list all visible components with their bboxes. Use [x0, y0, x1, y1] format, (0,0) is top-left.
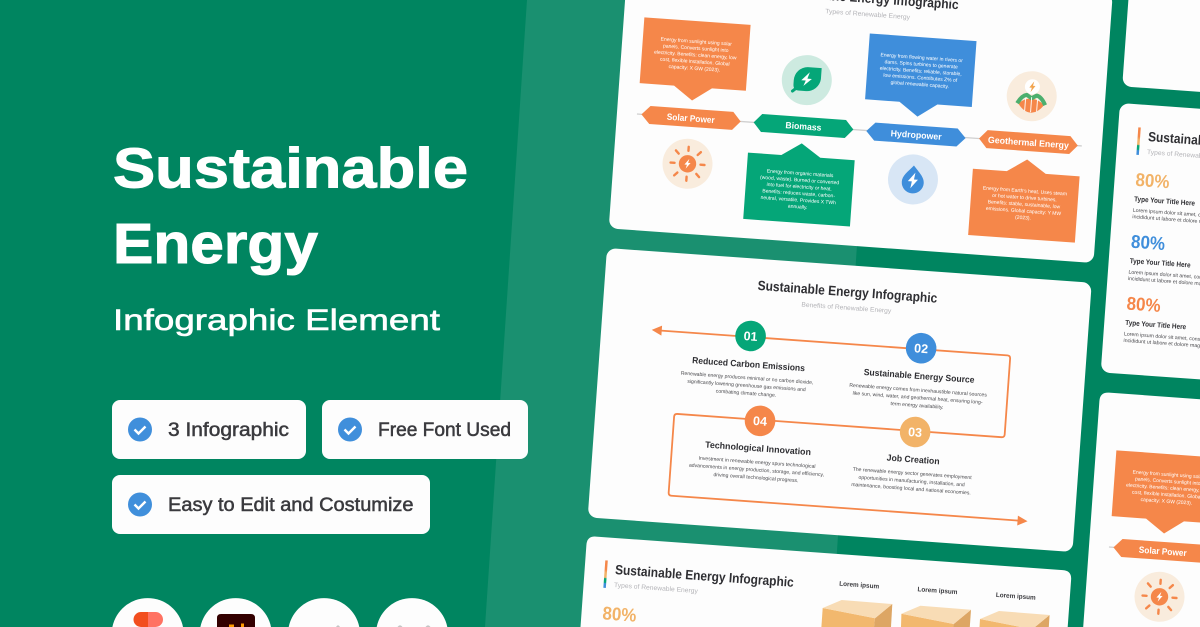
timeline line: [1109, 547, 1200, 556]
heading: Sustainable Energy: Energy: [113, 212, 318, 276]
label: Solar Power: [641, 105, 741, 130]
callout: biomass: [743, 140, 856, 227]
chart labels: Lorem ipsum: [917, 586, 958, 596]
panel: top right card: [1122, 0, 1200, 121]
icon: sun: [661, 137, 714, 191]
stat 1: [1132, 169, 1200, 233]
label: Biomass: [753, 113, 854, 139]
callout: biomass: annually.: [788, 204, 808, 211]
callout: hydropower: [864, 33, 977, 120]
callout: solar: [1111, 450, 1200, 537]
step 03: 03: [908, 425, 923, 440]
step 01: [679, 316, 817, 401]
stat: 80%: 80%: [602, 602, 637, 626]
feature chip: 3 Infographic: 3 Infographic: [168, 420, 289, 441]
stat 2: [1128, 231, 1200, 295]
callout: biomass: Benefits: reduces waste, carbon-: [762, 188, 835, 200]
heading: Sustainable Energy: [113, 136, 468, 276]
step 04: Investment in renewable energy spurs technological: [698, 456, 816, 470]
step 03: Job Creation: [886, 453, 940, 466]
callout: hydropower: low emissions. Contributes Z% of: [883, 73, 958, 84]
label: Biomass: Biomass: [785, 120, 822, 133]
icon: water drop: [886, 153, 940, 206]
label: Geothermal Energy: Geothermal Energy: [988, 135, 1069, 150]
feature chip: Easy to Edit and Costumize: Easy to Edit and Costumize: [168, 495, 414, 516]
chart labels: [839, 581, 1036, 602]
icon: geothermal: [1005, 69, 1058, 123]
callout: solar: Energy from sunlight using solar: [660, 37, 732, 48]
panel: benefits of renewable energy: [588, 248, 1092, 552]
3D bar 1: [821, 600, 892, 627]
step 02: like sun, wind, water, and geothermal heat, ensuring long-: [852, 391, 983, 406]
step 02: Renewable energy comes from inexhaustible natural sources: [849, 383, 988, 399]
callout: hydropower: global renewable capacity.: [890, 80, 949, 90]
callout: solar: panels. Converts sunlight into: [1135, 476, 1200, 487]
icon: sun: [1133, 570, 1186, 624]
icon: fourth software badge: [377, 598, 447, 627]
callout: geothermal: Benefits: stable, sustainable, low: [988, 199, 1061, 210]
callout: solar: [639, 17, 751, 104]
accent bar: [1136, 127, 1141, 155]
callout: geothermal: emissions. Global capacity: Y MW: [986, 206, 1062, 217]
callout: geothermal: or hot water to drive turbines.: [992, 193, 1057, 203]
label: Solar Power: Solar Power: [666, 112, 716, 125]
callout: geothermal: (2023).: [1015, 215, 1031, 222]
callout: geothermal: Energy from Earth's heat. Uses steam: [983, 185, 1067, 197]
feature chip: 3 Infographic: [112, 400, 306, 459]
feature chip: Free Font Used: Free Font Used: [378, 420, 511, 441]
subtitle: Benefits of Renewable Energy: [801, 302, 892, 315]
icon: third software badge: [289, 598, 359, 627]
stat 3: [1123, 292, 1200, 357]
step 01: 01: [743, 329, 758, 344]
step 01: Reduced Carbon Emissions: [692, 355, 805, 373]
callout: hydropower: electricity. Benefits: reliable, storable,: [880, 66, 962, 78]
step 04: 04: [753, 414, 767, 429]
timeline line: [637, 114, 1082, 146]
feature chip: Free Font Used: [322, 400, 528, 459]
label: Geothermal Energy: [978, 130, 1078, 155]
panel: right timeline card: [1083, 393, 1200, 627]
callout: solar: electricity. Benefits: clean energy, low: [654, 50, 737, 61]
heading: Sustainable Energy: Sustainable: [113, 136, 468, 200]
icon: Figma: [112, 598, 183, 627]
step 03: [851, 412, 976, 497]
subtitle: Types of Renewable Energy: [614, 582, 699, 595]
callout: biomass: Energy from organic materials: [767, 168, 834, 179]
step 03: opportunities in manufacturing, installation, and: [858, 475, 965, 488]
step 03: maintenance, boosting local and national economies.: [851, 482, 971, 497]
subtitle: Types of Renewable Energy: [825, 8, 911, 21]
label: Solar Power: Solar Power: [1138, 545, 1188, 558]
callout: geothermal: [968, 156, 1081, 243]
chart labels: Lorem ipsum: [996, 592, 1036, 602]
callout: biomass: neutral, versatile. Provides X TWh: [760, 195, 836, 206]
callout: biomass: (wood, waste). Burned or converted: [760, 175, 840, 186]
stat 3: 80%: [1126, 293, 1161, 316]
step 02: 02: [914, 341, 929, 356]
3D bar 2: [901, 606, 971, 627]
title: Sustainable Energy Infographic: [757, 278, 938, 306]
3D bar 3: [980, 611, 1050, 627]
step 03: The renewable energy sector generates employment: [852, 467, 972, 481]
step 02: [848, 328, 991, 414]
callout: solar: cost, flexible installation. Global: [660, 57, 730, 68]
panel: bottom bar chart card: [580, 537, 1071, 627]
callout: biomass: into fuel for electricity or heat.: [766, 182, 832, 193]
icon: leaf: [780, 53, 834, 107]
title: Sustainable Energy Infographic: [615, 562, 795, 590]
callout: hydropower: Energy from flowing water in rivers or: [880, 52, 963, 64]
label: Hydropower: Hydropower: [890, 128, 942, 142]
step 01: significantly lowering greenhouse gas emissions and: [687, 379, 806, 393]
panel: types of renewable energy timeline: [609, 0, 1113, 263]
callout: solar: capacity: X GW (2023).: [668, 64, 720, 74]
background diagonal band: [485, 0, 873, 627]
step 04: Technological Innovation: [705, 440, 811, 457]
chart labels: Lorem ipsum: [839, 581, 879, 591]
label: Solar Power: [1113, 538, 1200, 563]
step 01: Renewable energy produces minimal or no carbon dioxide,: [681, 371, 813, 386]
step 02: Sustainable Energy Source: [863, 367, 975, 385]
step 04: driving overall technological progress.: [713, 472, 799, 484]
panel: right statistics card: [1101, 103, 1200, 407]
callout: solar: cost, flexible installation. Global: [1132, 490, 1200, 501]
callout: solar: panels. Converts sunlight into: [663, 43, 729, 54]
label: Hydropower: [866, 122, 966, 147]
feature chip: Easy to Edit and Costumize: [112, 475, 430, 534]
stat 2: Type Your Title Here: [1129, 256, 1191, 269]
stat 1: 80%: [1135, 169, 1170, 192]
stat 3: Type Your Title Here: [1125, 318, 1186, 331]
step 01: combating climate change.: [716, 389, 776, 399]
accent bar: [603, 560, 608, 588]
icon: Adobe Illustrator: [200, 598, 271, 627]
stat 2: 80%: [1130, 231, 1166, 254]
subheading: Infographic Element: [113, 304, 441, 337]
callout: solar: capacity: X GW (2023).: [1140, 497, 1192, 507]
step 04: advancements in energy production, storage, and efficiency,: [689, 463, 824, 478]
step 04: [688, 401, 829, 486]
arrow: snake path: [640, 325, 1040, 526]
step 02: term energy availability.: [890, 401, 944, 411]
callout: hydropower: dams. Spins turbines to generate: [884, 59, 958, 71]
